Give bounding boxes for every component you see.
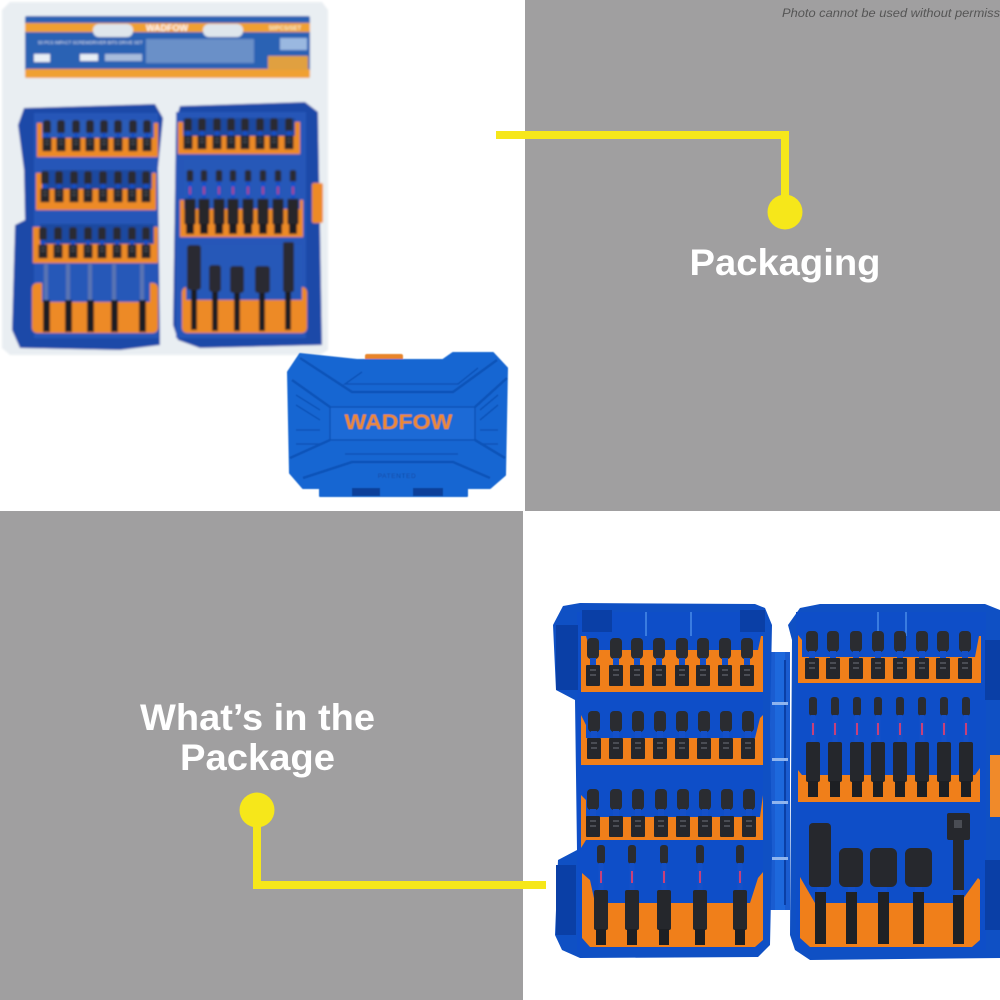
closed blue case with WADFOW logo [288, 353, 507, 496]
patented mark: PATENTED [378, 473, 416, 480]
left case in blister [12, 104, 163, 350]
bits row 1 [805, 631, 972, 679]
open case with contents [553, 603, 1000, 960]
header card: 50 PCS IMPACT SCREWDRIVER BITS DRIVE SET [38, 40, 143, 45]
packaged product: blister pack [2, 2, 328, 355]
tray row 4 [582, 872, 763, 947]
blister shell [2, 2, 328, 355]
left half of case [553, 603, 772, 958]
header card: WADFOW [146, 23, 188, 33]
header card [25, 16, 310, 78]
tray row 2 [581, 715, 763, 765]
callout: packaging connector [496, 135, 785, 212]
side clip [990, 755, 1000, 817]
tray row 3 [581, 795, 763, 848]
bits row 1 [586, 638, 754, 686]
right half of case [788, 604, 1000, 960]
callout dot: contents [240, 792, 274, 828]
tray row 1 [581, 636, 763, 692]
bits row 3 [586, 789, 756, 837]
WADFOW logo: WADFOW [344, 411, 453, 434]
bits row 2 [587, 711, 755, 759]
tray row 2 [798, 768, 980, 802]
panel: packaging grey background [525, 0, 1000, 511]
header card: 50PCS/SET [269, 26, 302, 32]
hinge [770, 652, 790, 910]
heading: What's in the Package: Package [180, 737, 335, 778]
long bits row 4 [594, 845, 747, 945]
panel: contents grey background [0, 511, 523, 1000]
heading: Packaging: Packaging [690, 242, 880, 283]
heading: What's in the Package: What’s in the [140, 697, 375, 738]
right case in blister [173, 102, 323, 348]
callout: contents connector [257, 810, 546, 885]
photo notice text: Photo cannot be used without permiss [782, 8, 1000, 20]
callout dot: packaging [768, 194, 802, 230]
long bits row 2 [806, 697, 973, 797]
heading: What's in the Package [140, 697, 375, 778]
tray row 1 [798, 635, 981, 683]
tray row 3 [800, 877, 980, 947]
sockets and adapter [809, 813, 970, 944]
